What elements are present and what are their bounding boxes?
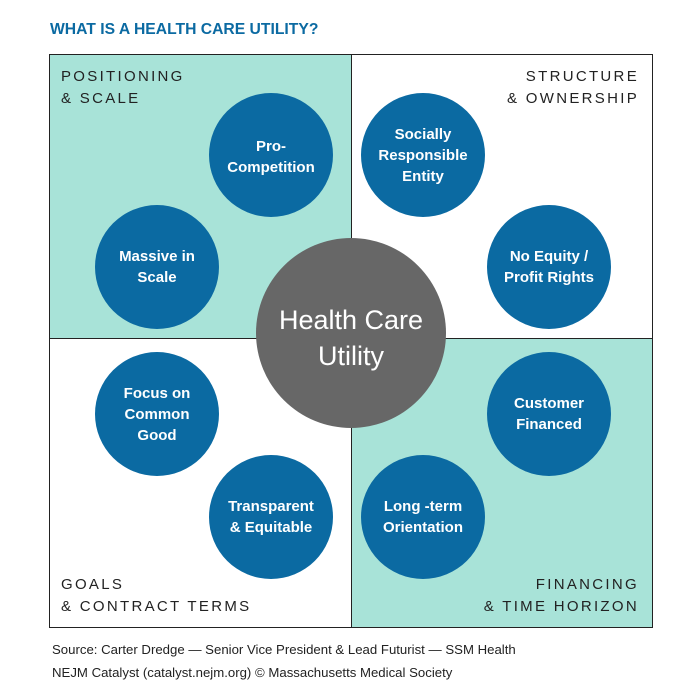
- circle: socially responsible entity: Entity: [402, 168, 444, 184]
- panel: goals & contract terms: [50, 339, 352, 627]
- heading: financing & time horizon: & TIME HORIZON: [484, 598, 639, 615]
- circle: customer financed: Financed: [516, 416, 582, 433]
- heading: financing & time horizon: FINANCING: [536, 576, 639, 593]
- circle: socially responsible entity: Socially: [395, 126, 451, 142]
- center circle: health care utility: [256, 238, 446, 428]
- circle: customer financed: Customer: [514, 395, 584, 412]
- circle: customer financed: [487, 352, 611, 476]
- circle: long-term orientation: Long -term: [384, 498, 462, 515]
- panel: positioning & scale: [50, 55, 352, 339]
- circle: no equity: No Equity /: [510, 248, 588, 265]
- center circle: health care utility: Utility: [318, 341, 384, 371]
- center circle: health care utility: Health Care: [279, 305, 423, 335]
- heading: goals & contract terms: [61, 576, 251, 615]
- heading: positioning & scale: [61, 68, 185, 107]
- heading: structure & ownership: [507, 68, 639, 107]
- heading: structure & ownership: STRUCTURE: [526, 68, 639, 85]
- panel: structure & ownership: [352, 55, 652, 339]
- credit text: NEJM Catalyst (catalyst.nejm.org) © Massachusetts Medical Society: [52, 665, 452, 680]
- circle: long-term orientation: [361, 455, 485, 579]
- circle: transparent & equitable: Transparent: [228, 498, 314, 515]
- circle: transparent & equitable: & Equitable: [230, 519, 312, 536]
- circle: massive in scale: Scale: [137, 269, 177, 286]
- circle: no equity: Profit Rights: [504, 269, 594, 286]
- heading: positioning & scale: & SCALE: [61, 90, 140, 107]
- panel: financing & time horizon: [352, 339, 652, 627]
- heading: financing & time horizon: [484, 576, 639, 615]
- circle: pro-competition: [209, 93, 333, 217]
- circle: focus on common good: Common: [124, 406, 189, 422]
- circle: pro-competition: Competition: [227, 158, 315, 176]
- circle: socially responsible entity: Responsible: [378, 146, 468, 164]
- heading: goals & contract terms: GOALS: [61, 576, 124, 593]
- circle: pro-competition: Pro-: [256, 138, 286, 154]
- circle: no equity: [487, 205, 611, 329]
- circle: long-term orientation: Orientation: [383, 519, 463, 536]
- source text: Source: Carter Dredge — Senior Vice President & Lead Futurist — SSM Health: [52, 642, 516, 657]
- circle: socially responsible entity: [361, 93, 485, 217]
- heading: positioning & scale: POSITIONING: [61, 68, 185, 85]
- heading: goals & contract terms: & CONTRACT TERMS: [61, 598, 251, 615]
- title: WHAT IS A HEALTH CARE UTILITY?: [50, 21, 318, 38]
- heading: structure & ownership: & OWNERSHIP: [507, 90, 639, 107]
- circle: focus on common good: [95, 352, 219, 476]
- circle: focus on common good: Good: [137, 426, 177, 444]
- circle: massive in scale: Massive in: [119, 248, 195, 265]
- circle: massive in scale: [95, 205, 219, 329]
- circle: transparent & equitable: [209, 455, 333, 579]
- circle: focus on common good: Focus on: [124, 384, 190, 402]
- grid frame: [49, 54, 653, 628]
